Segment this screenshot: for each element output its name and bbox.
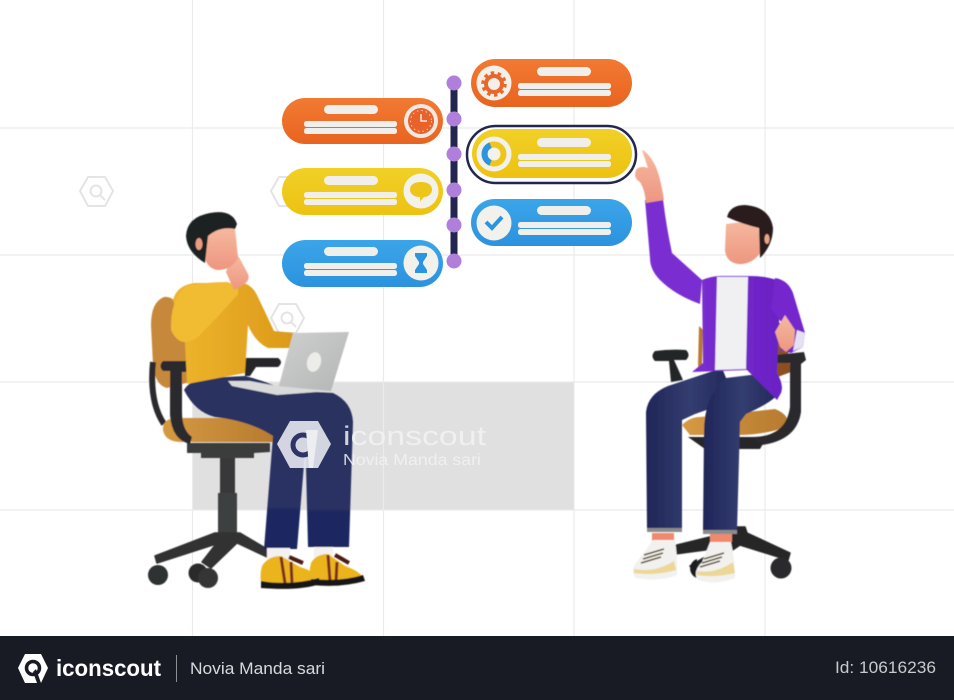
left shoes xyxy=(260,547,365,589)
icon: gear xyxy=(476,66,512,100)
icon: check mark xyxy=(476,206,512,240)
right head xyxy=(725,205,773,264)
card: blue hourglass xyxy=(282,240,443,287)
right torso xyxy=(692,276,782,400)
right near leg xyxy=(703,372,782,531)
right shoes xyxy=(633,533,735,583)
left head xyxy=(186,212,238,270)
white shirt stripe xyxy=(715,277,748,370)
timeline spine with nodes xyxy=(446,76,462,268)
small watermark hexagons xyxy=(80,177,304,333)
icon: hourglass xyxy=(404,246,438,280)
right raised arm xyxy=(645,199,702,304)
icon: speech bubble xyxy=(404,174,438,208)
center watermark text: iconscout xyxy=(343,421,487,451)
footer logo xyxy=(18,654,48,683)
left far leg xyxy=(285,390,353,547)
left chair xyxy=(148,297,281,588)
right person on chair pointing xyxy=(633,150,806,583)
center watermark text: Novia Manda sari xyxy=(343,452,481,469)
icon: clock xyxy=(404,104,438,138)
left near leg xyxy=(184,376,308,549)
trouser hems xyxy=(647,528,737,534)
icon: donut chart xyxy=(476,136,512,172)
laptop xyxy=(228,332,349,395)
center watermark text xyxy=(343,421,487,469)
right chair xyxy=(652,310,806,578)
card: yellow speech xyxy=(282,168,443,215)
footer brand: iconscout xyxy=(56,655,161,681)
left torso sweater xyxy=(173,283,294,384)
footer bar xyxy=(0,636,954,700)
card: orange gear xyxy=(471,59,632,107)
pointing hand xyxy=(635,150,664,203)
card: yellow donut highlighted xyxy=(467,126,636,183)
card: blue check xyxy=(471,199,632,246)
footer author: Novia Manda sari xyxy=(190,660,325,678)
card: orange clock xyxy=(282,98,443,144)
right lowered arm xyxy=(771,278,805,353)
left raised arm xyxy=(171,282,238,342)
right resting hand xyxy=(775,315,795,352)
left hand on chin xyxy=(226,256,249,290)
center watermark logo xyxy=(277,421,331,468)
footer id: Id: 10616236 xyxy=(835,659,936,677)
right far leg xyxy=(646,368,735,530)
left person on chair with laptop xyxy=(148,212,365,589)
